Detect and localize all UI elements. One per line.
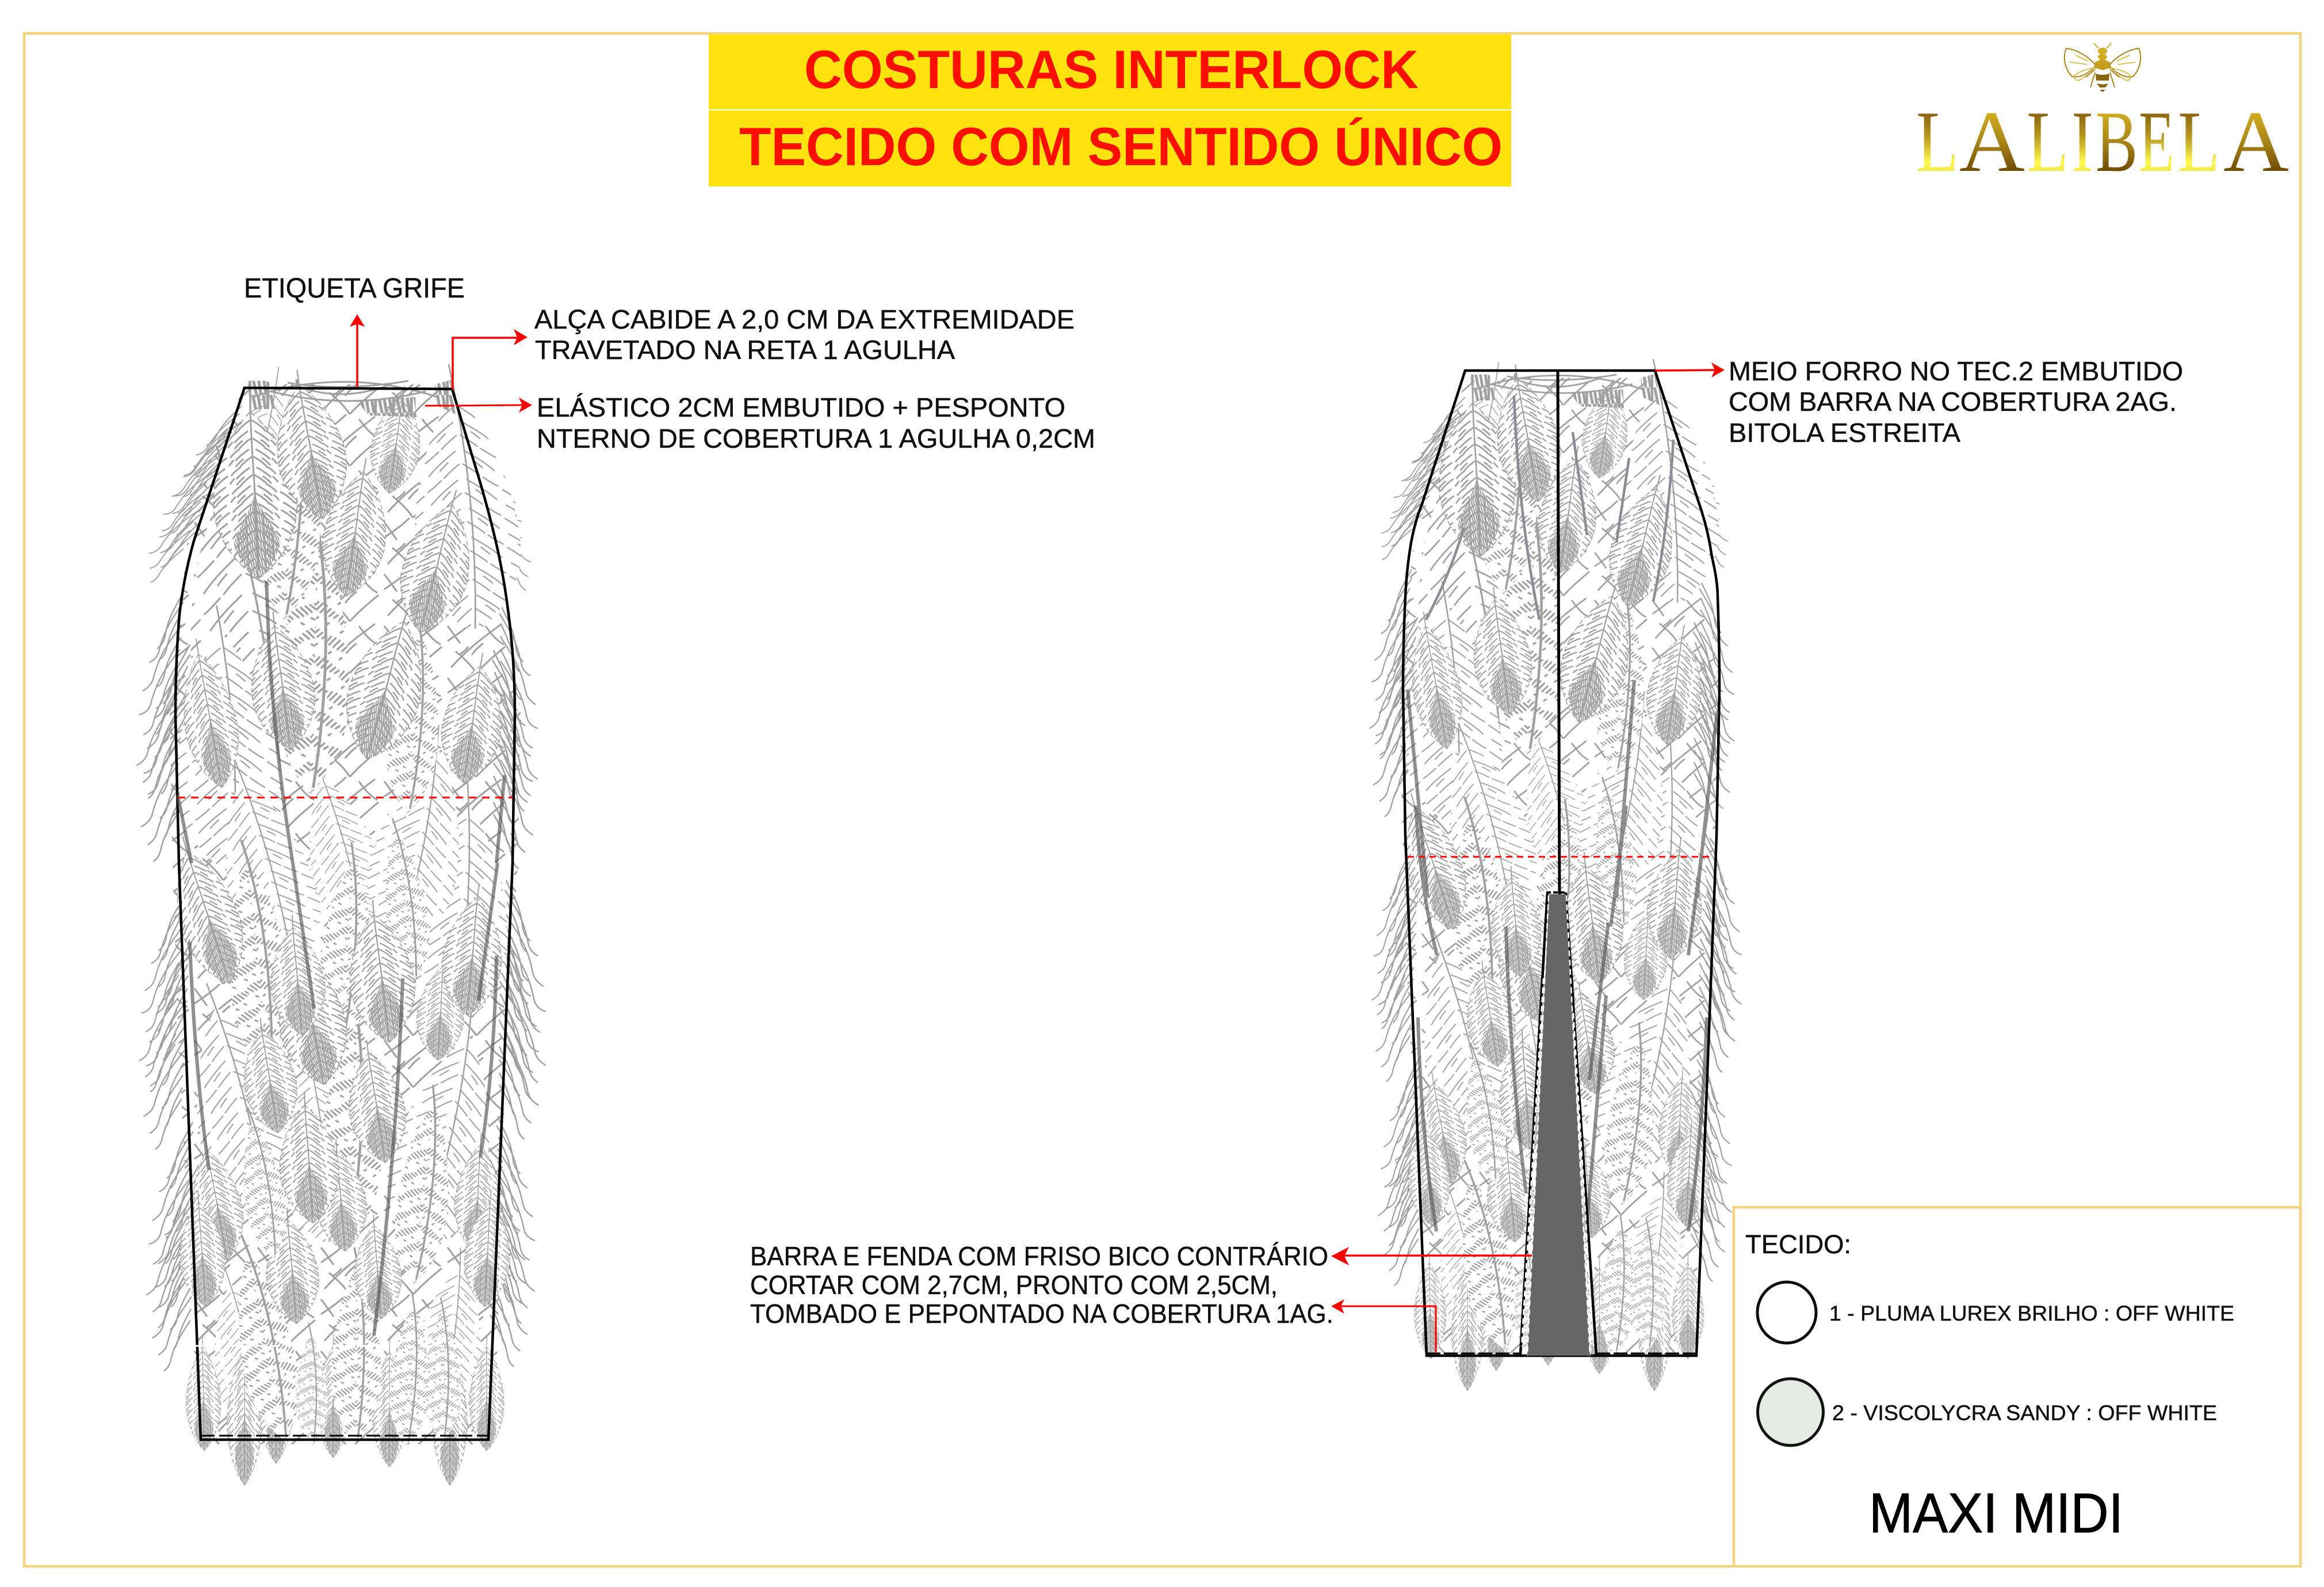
center back seam <box>1558 371 1559 894</box>
front skirt technical drawing <box>135 358 545 1486</box>
back skirt feather print <box>1368 354 1741 1391</box>
callout: barra e fenda: BARRA E FENDA COM FRISO BICO CONTRÁRIO <box>750 1241 1328 1271</box>
arrow: barra slit <box>1331 1247 1532 1265</box>
back skirt technical drawing <box>1368 354 1741 1391</box>
callout: barra e fenda <box>750 1241 1532 1353</box>
callout: meio forro: BITOLA ESTREITA <box>1729 418 1960 448</box>
callout: elástico <box>425 392 1095 453</box>
callout: alça cabide: ALÇA CABIDE A 2,0 CM DA EXTREMIDADE <box>534 304 1075 334</box>
title banner: COSTURAS INTERLOCK <box>804 39 1419 100</box>
callout: etiqueta grife <box>244 273 465 387</box>
arrow: elástico <box>425 398 532 413</box>
logo wordmark: L <box>2178 93 2220 190</box>
back skirt outline <box>1403 371 1719 1356</box>
logo wordmark: A <box>2223 93 2289 190</box>
back red dashed hip line <box>1408 856 1712 857</box>
logo: Lalibela with bee <box>1916 43 2289 190</box>
logo wordmark: L <box>2027 93 2069 190</box>
back slit <box>1520 892 1596 1356</box>
swatch: fabric 2 <box>1758 1379 1824 1445</box>
model name: MAXI MIDI <box>1869 1482 2123 1544</box>
front red dashed hip line <box>178 796 513 799</box>
front hem stitching <box>201 1435 488 1436</box>
front skirt outline <box>175 388 515 1440</box>
logo wordmark: A <box>1959 93 2025 190</box>
label: fabric 1: 1 - PLUMA LUREX BRILHO : OFF WHITE <box>1829 1301 2234 1325</box>
front skirt shadow folds <box>178 581 504 1336</box>
arrow: etiqueta <box>350 314 365 387</box>
title banner: TECIDO COM SENTIDO ÚNICO <box>739 116 1503 177</box>
legend heading: TECIDO: <box>1745 1230 1851 1259</box>
callout: meio forro: MEIO FORRO NO TEC.2 EMBUTIDO <box>1729 356 2183 386</box>
icon: golden bee <box>2065 43 2140 92</box>
logo wordmark: E <box>2139 93 2174 190</box>
title banner <box>709 35 1511 186</box>
callout: elástico: ELÁSTICO 2CM EMBUTIDO + PESPONTO <box>537 392 1065 422</box>
callout: meio forro <box>1655 356 2183 448</box>
front skirt feather print <box>135 358 545 1486</box>
callout: barra e fenda: TOMBADO E PEPONTADO NA COBERTURA 1AG. <box>750 1299 1333 1329</box>
callout: elástico: NTERNO DE COBERTURA 1 AGULHA 0,2CM <box>537 424 1095 453</box>
logo wordmark: B <box>2096 93 2138 190</box>
back skirt shadow folds <box>1408 680 1717 1231</box>
callout: meio forro: COM BARRA NA COBERTURA 2AG. <box>1729 387 2177 417</box>
callout: barra e fenda: CORTAR COM 2,7CM, PRONTO COM 2,5CM, <box>750 1270 1278 1300</box>
logo wordmark <box>1916 93 2289 190</box>
callout: etiqueta grife: ETIQUETA GRIFE <box>244 273 465 304</box>
callout: alça cabide <box>453 304 1075 390</box>
arrow: alça <box>453 329 528 390</box>
arrow: meio forro <box>1655 363 1725 377</box>
swatch: fabric 1 <box>1757 1282 1816 1343</box>
callout: alça cabide: TRAVETADO NA RETA 1 AGULHA <box>535 335 955 365</box>
logo wordmark: I <box>2071 93 2093 190</box>
logo wordmark: L <box>1916 93 1959 190</box>
arrow: hem <box>1331 1299 1436 1353</box>
label: fabric 2: 2 - VISCOLYCRA SANDY : OFF WHITE <box>1832 1401 2217 1425</box>
back hem stitching <box>1427 1352 1696 1355</box>
panel: fabric legend <box>1734 1207 2300 1566</box>
